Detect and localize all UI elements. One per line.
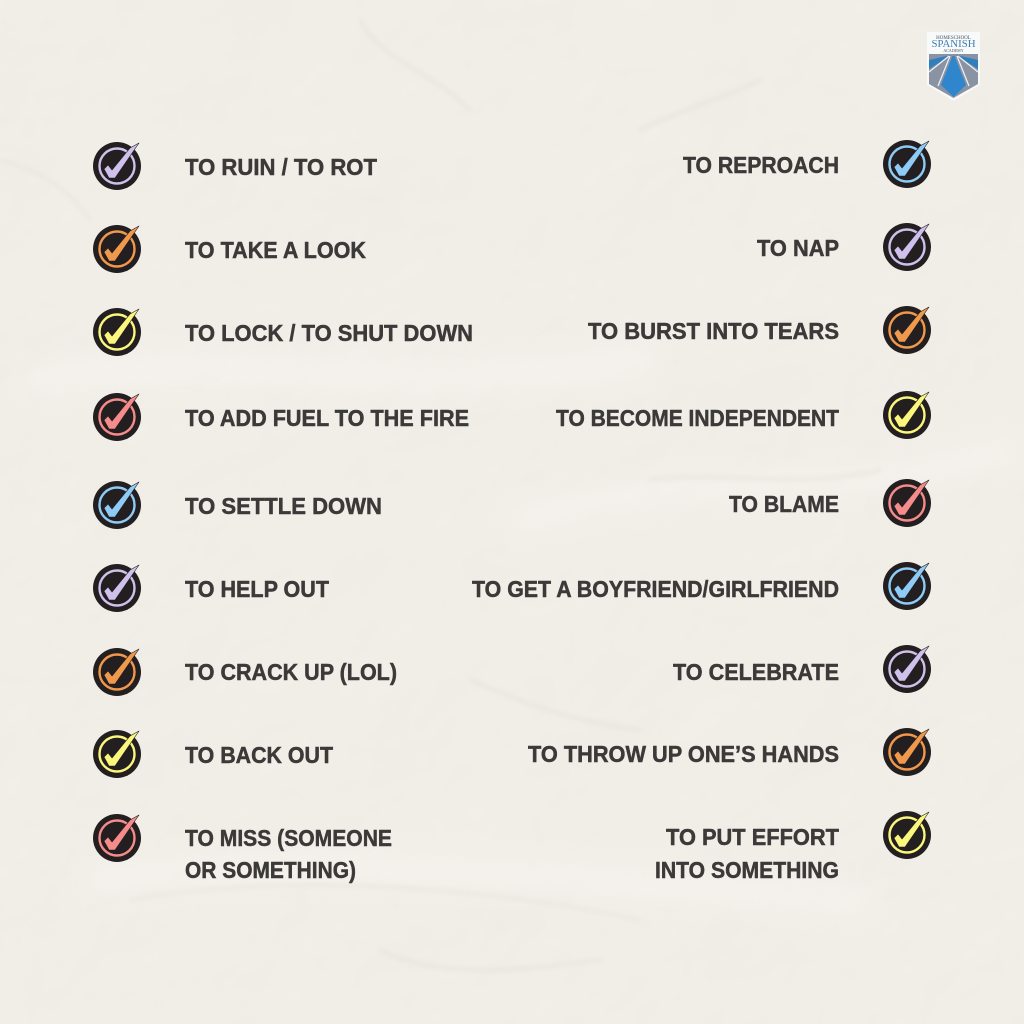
right item 8: TO THROW UP ONE’S HANDS <box>528 741 839 767</box>
right item 6 <box>472 562 931 610</box>
left item 4 <box>93 393 469 441</box>
left item 2: TO TAKE A LOOK <box>185 237 366 263</box>
left item 8: TO BACK OUT <box>185 742 333 768</box>
right item 9 <box>655 811 931 883</box>
right item 5: TO BLAME <box>729 491 839 517</box>
left item 8 <box>93 730 333 778</box>
left item 1 <box>93 142 377 190</box>
left item 5: TO SETTLE DOWN <box>185 493 382 519</box>
right item 6: TO GET A BOYFRIEND/GIRLFRIEND <box>472 576 839 602</box>
right item 5 <box>729 479 931 527</box>
left item 9 <box>93 814 392 883</box>
right item 9: TO PUT EFFORT <box>666 824 839 850</box>
left item 3 <box>93 308 473 356</box>
left item 9: TO MISS (SOMEONE <box>185 825 392 851</box>
right item 2 <box>757 223 931 271</box>
right item 3 <box>588 306 931 354</box>
left item 3: TO LOCK / TO SHUT DOWN <box>185 320 473 346</box>
left item 1: TO RUIN / TO ROT <box>185 154 377 180</box>
logo: Spanish academy shield: SPANISH <box>932 39 976 50</box>
logo: Spanish academy shield <box>927 32 980 101</box>
logo: Spanish academy shield: ACADEMY <box>943 48 964 53</box>
right item 7: TO CELEBRATE <box>673 659 839 685</box>
left item 4: TO ADD FUEL TO THE FIRE <box>185 405 469 431</box>
left item 2 <box>93 225 366 273</box>
left item 6: TO HELP OUT <box>185 576 329 602</box>
right item 1 <box>683 140 931 188</box>
logo: Spanish academy shield: HOMESCHOOL <box>936 36 971 41</box>
right item 1: TO REPROACH <box>683 152 839 178</box>
left item 6 <box>93 564 329 612</box>
left item 9: OR SOMETHING) <box>185 857 356 883</box>
right item 9: INTO SOMETHING <box>655 857 839 883</box>
left item 7: TO CRACK UP (LOL) <box>185 659 397 685</box>
right item 7 <box>673 645 931 693</box>
left item 7 <box>93 648 397 696</box>
right item 2: TO NAP <box>757 235 839 261</box>
right item 4 <box>556 391 931 439</box>
left item 5 <box>93 481 382 529</box>
right item 4: TO BECOME INDEPENDENT <box>556 405 839 431</box>
right item 8 <box>528 728 931 776</box>
right item 3: TO BURST INTO TEARS <box>588 318 839 344</box>
